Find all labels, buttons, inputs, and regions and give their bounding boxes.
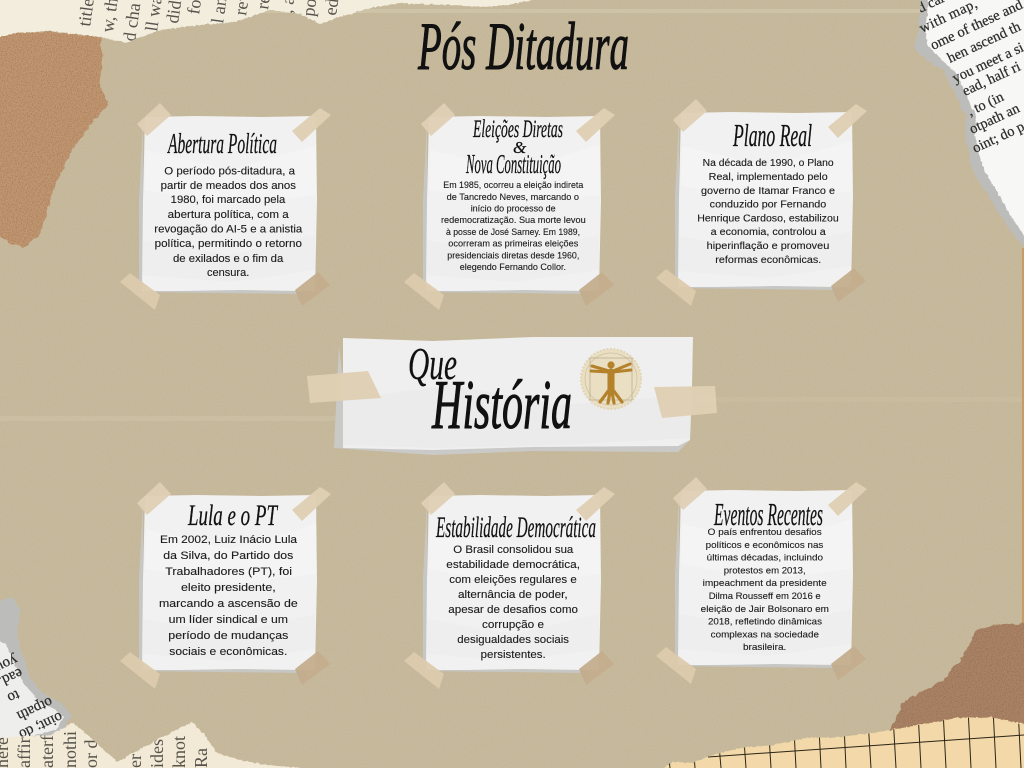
text block: Eventos Recentes: 2018, refletindo dinâmicas [708, 616, 822, 627]
text block: Plano Real: governo de Itamar Franco e [701, 186, 835, 197]
text block: Abertura Política: revogação do AI-5 e a anistia [154, 224, 302, 236]
text block: Abertura Política: de exilados e o fim da [173, 253, 283, 265]
panel: Eleições Diretas e Nova Constituição [404, 103, 615, 310]
text block: Plano Real [697, 158, 839, 266]
decoration: torn book page top: d cha [119, 2, 144, 43]
decoration: grid paper bottom right [664, 716, 1024, 768]
text block: Estabilidade Democrática: desigualdades sociais [457, 634, 570, 646]
text block: Plano Real: Real, implementado pelo [709, 172, 828, 183]
panel: Plano Real [656, 99, 867, 306]
text block: Estabilidade Democrática: O Brasil consolidou sua [453, 544, 573, 556]
decoration: torn book page top right: ead, half ri [960, 59, 1023, 100]
text block: Eleições Diretas e Nova Constituição: à posse de José Sarney. Em 1989, [446, 227, 580, 237]
heading: Que: Que [408, 338, 457, 389]
panel: Eleições Diretas e Nova Constituição: Nova Constituição [466, 149, 561, 179]
text block: Eventos Recentes: impeachment da presidente [703, 578, 827, 589]
decoration: torn book page top [0, 0, 535, 43]
decoration: torn book page bottom left: to [5, 686, 22, 706]
decoration: cream book page bottom: er [125, 754, 145, 768]
text block: Abertura Política: abertura política, com a [168, 209, 289, 221]
text block: Estabilidade Democrática: alternância de poder, [458, 589, 568, 601]
text block: Plano Real: hiperinflação e promoveu [707, 241, 829, 252]
panel: central banner Que História [307, 337, 717, 455]
text block: Plano Real: Henrique Cardoso, estabilizou [697, 213, 839, 224]
text block: Estabilidade Democrática: apesar de desafios como [448, 604, 578, 616]
decoration: torn book page bottom left: otpath [14, 693, 55, 724]
text block: Estabilidade Democrática: com eleições regulares e [449, 574, 577, 586]
text block: Eleições Diretas e Nova Constituição: de Tancredo Neves, marcando o [447, 192, 579, 202]
decoration: torn book page top right: hen ascend th [945, 18, 1024, 67]
text block: Lula e o PT: um líder sindical e um [169, 614, 288, 626]
decoration: torn brown paper top left [0, 31, 108, 248]
text block: Lula e o PT [159, 534, 298, 658]
text block: Lula e o PT: Trabalhadores (PT), foi [165, 566, 292, 578]
icon: vitruvian man seal [581, 349, 641, 409]
text block: Eleições Diretas e Nova Constituição: início do processo de [471, 204, 556, 214]
text block: Eventos Recentes: complexas na sociedade [711, 629, 819, 640]
text block: Eventos Recentes: políticos e econômicos nas [706, 540, 824, 551]
text block: Estabilidade Democrática [446, 544, 580, 661]
text block: Lula e o PT: eleito presidente, [181, 582, 276, 594]
heading: Eleições Diretas e Nova Constituição: Eleições Diretas [472, 116, 563, 143]
decoration: cream book page bottom: or d [81, 740, 101, 768]
text block: Abertura Política: O período pós-ditadura, a [164, 166, 295, 178]
text block: Eventos Recentes: brasileira. [743, 642, 786, 653]
panel: Lula e o PT [120, 482, 331, 689]
decoration: torn book page bottom left: oint; do [16, 708, 65, 742]
decoration: tan edge strip on the right [1022, 248, 1024, 624]
text block: Eventos Recentes: O país enfrentou desafios [708, 527, 822, 538]
heading: Plano Real: Plano Real [732, 117, 812, 153]
text block: Abertura Política: política, permitindo o retorno [155, 238, 302, 250]
text block: Plano Real: a economia, controlou a [711, 227, 826, 238]
heading: Estabilidade Democrática: Estabilidade Democrática [435, 511, 596, 544]
text block: Eleições Diretas e Nova Constituição: Em 1985, ocorreu a eleição indireta [443, 180, 583, 190]
decoration: cream book page bottom [0, 722, 300, 768]
tape left [307, 371, 381, 403]
decoration: cream book page bottom: nothi [60, 731, 80, 768]
text block: Lula e o PT: marcando a ascensão de [159, 598, 298, 610]
text block: Lula e o PT: sociais e econômicas. [169, 646, 287, 658]
decoration: brown paper bottom right [887, 623, 1024, 768]
heading: Eleições Diretas e Nova Constituição: & [513, 138, 527, 157]
decoration: torn book page top right [915, 0, 1024, 250]
heading: Lula e o PT: Lula e o PT [187, 499, 278, 532]
text block: Eleições Diretas e Nova Constituição: presidenciais diretas desde 1960, [447, 250, 579, 260]
decoration: cream book page bottom: affir [14, 737, 34, 768]
tape right [654, 386, 717, 418]
heading: História: História [431, 367, 572, 444]
text block: Eleições Diretas e Nova Constituição: elegendo Fernando Collor. [460, 262, 566, 272]
decoration: cream book page bottom: aterf [37, 735, 57, 768]
text block: Eventos Recentes: eleição de Jair Bolsonaro em [701, 604, 829, 615]
panel: Estabilidade Democrática [404, 482, 615, 689]
text block: Lula e o PT: da Silva, do Partido dos [163, 550, 294, 562]
text block: Estabilidade Democrática: estabilidade democrática, [446, 559, 580, 571]
decoration: torn book page bottom left [0, 598, 72, 745]
text block: Eleições Diretas e Nova Constituição [441, 180, 586, 272]
text block: Abertura Política [154, 166, 302, 279]
text block: Lula e o PT: Em 2002, Luiz Inácio Lula [160, 534, 298, 546]
text block: Estabilidade Democrática: persistentes. [481, 649, 546, 661]
panel: Eventos Recentes [656, 477, 867, 684]
panel: Eventos Recentes: Eventos Recentes [714, 496, 823, 532]
text block: Estabilidade Democrática: corrupção e [482, 619, 544, 631]
panel: Abertura Política [120, 103, 331, 310]
text block: Abertura Política: partir de meados dos anos [161, 180, 297, 192]
text block: Eleições Diretas e Nova Constituição: ocorreram as primeiras eleições [448, 238, 579, 248]
decoration: cream book page bottom: ides [147, 739, 167, 768]
text block: Abertura Política: 1980, foi marcado pela [171, 194, 285, 206]
decoration: torn book page top right: otpath an [967, 100, 1023, 138]
text block: Eleições Diretas e Nova Constituição: redemocratização. Sua morte levou [441, 215, 586, 225]
text block: Eventos Recentes: protestos em 2013, [724, 565, 806, 576]
decoration: torn book page top right: , to (in [965, 89, 1007, 120]
text block: Eventos Recentes [701, 527, 829, 653]
text block: Plano Real: conduzido por Fernando [710, 200, 827, 211]
text block: Plano Real: Na década de 1990, o Plano [703, 158, 834, 169]
text block: Eventos Recentes: últimas décadas, incluindo [707, 552, 823, 563]
text block: Abertura Política: censura. [207, 267, 249, 279]
heading: Eleições Diretas e Nova Constituição [466, 116, 563, 179]
text block: Lula e o PT: período de mudanças [168, 630, 289, 642]
title: Pós Ditadura [417, 8, 629, 84]
heading: Abertura Política: Abertura Política [167, 128, 277, 160]
decoration: cream book page bottom: Ra [191, 748, 211, 768]
decoration: cream book page bottom: knot [169, 736, 189, 768]
text block: Plano Real: reformas econômicas. [715, 255, 821, 266]
text block: Eventos Recentes: Dilma Rousseff em 2016 e [709, 591, 821, 602]
